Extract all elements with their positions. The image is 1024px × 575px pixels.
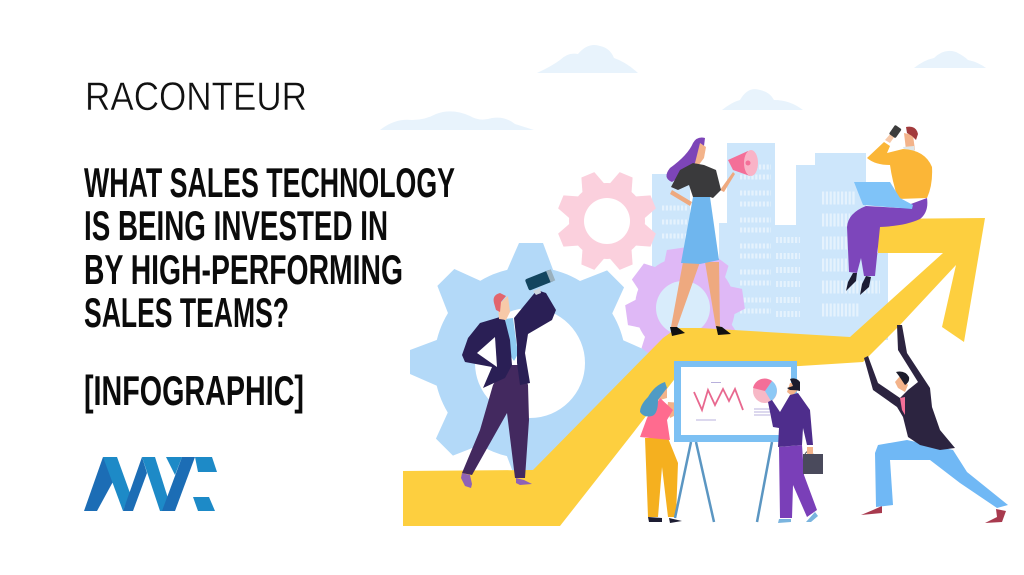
gear: pink <box>556 170 658 272</box>
figure: seated man with laptop <box>846 125 932 295</box>
figure: woman with megaphone <box>666 138 758 336</box>
buildings <box>652 143 888 340</box>
clouds <box>380 45 986 130</box>
title: BY HIGH-PERFORMING <box>84 246 403 293</box>
subtitle: infographic tag: [INFOGRAPHIC] <box>84 367 304 414</box>
title <box>84 159 455 336</box>
logo: Raconteur: RACONTEUR <box>85 75 307 119</box>
figure: man with briefcase <box>768 378 823 523</box>
title: WHAT SALES TECHNOLOGY <box>84 159 455 206</box>
whiteboard with chart <box>674 361 797 522</box>
figure: man lifting arrow <box>861 325 1008 523</box>
title: SALES TEAMS? <box>84 289 289 336</box>
gear: purple <box>624 246 746 363</box>
title: IS BEING INVESTED IN <box>84 202 388 249</box>
figure: man with binoculars <box>461 269 556 488</box>
gear: blue <box>410 243 650 483</box>
figure: presenter woman <box>640 382 693 523</box>
logo: MTC mark <box>84 457 217 511</box>
arrow: rising yellow arrow <box>403 218 985 526</box>
